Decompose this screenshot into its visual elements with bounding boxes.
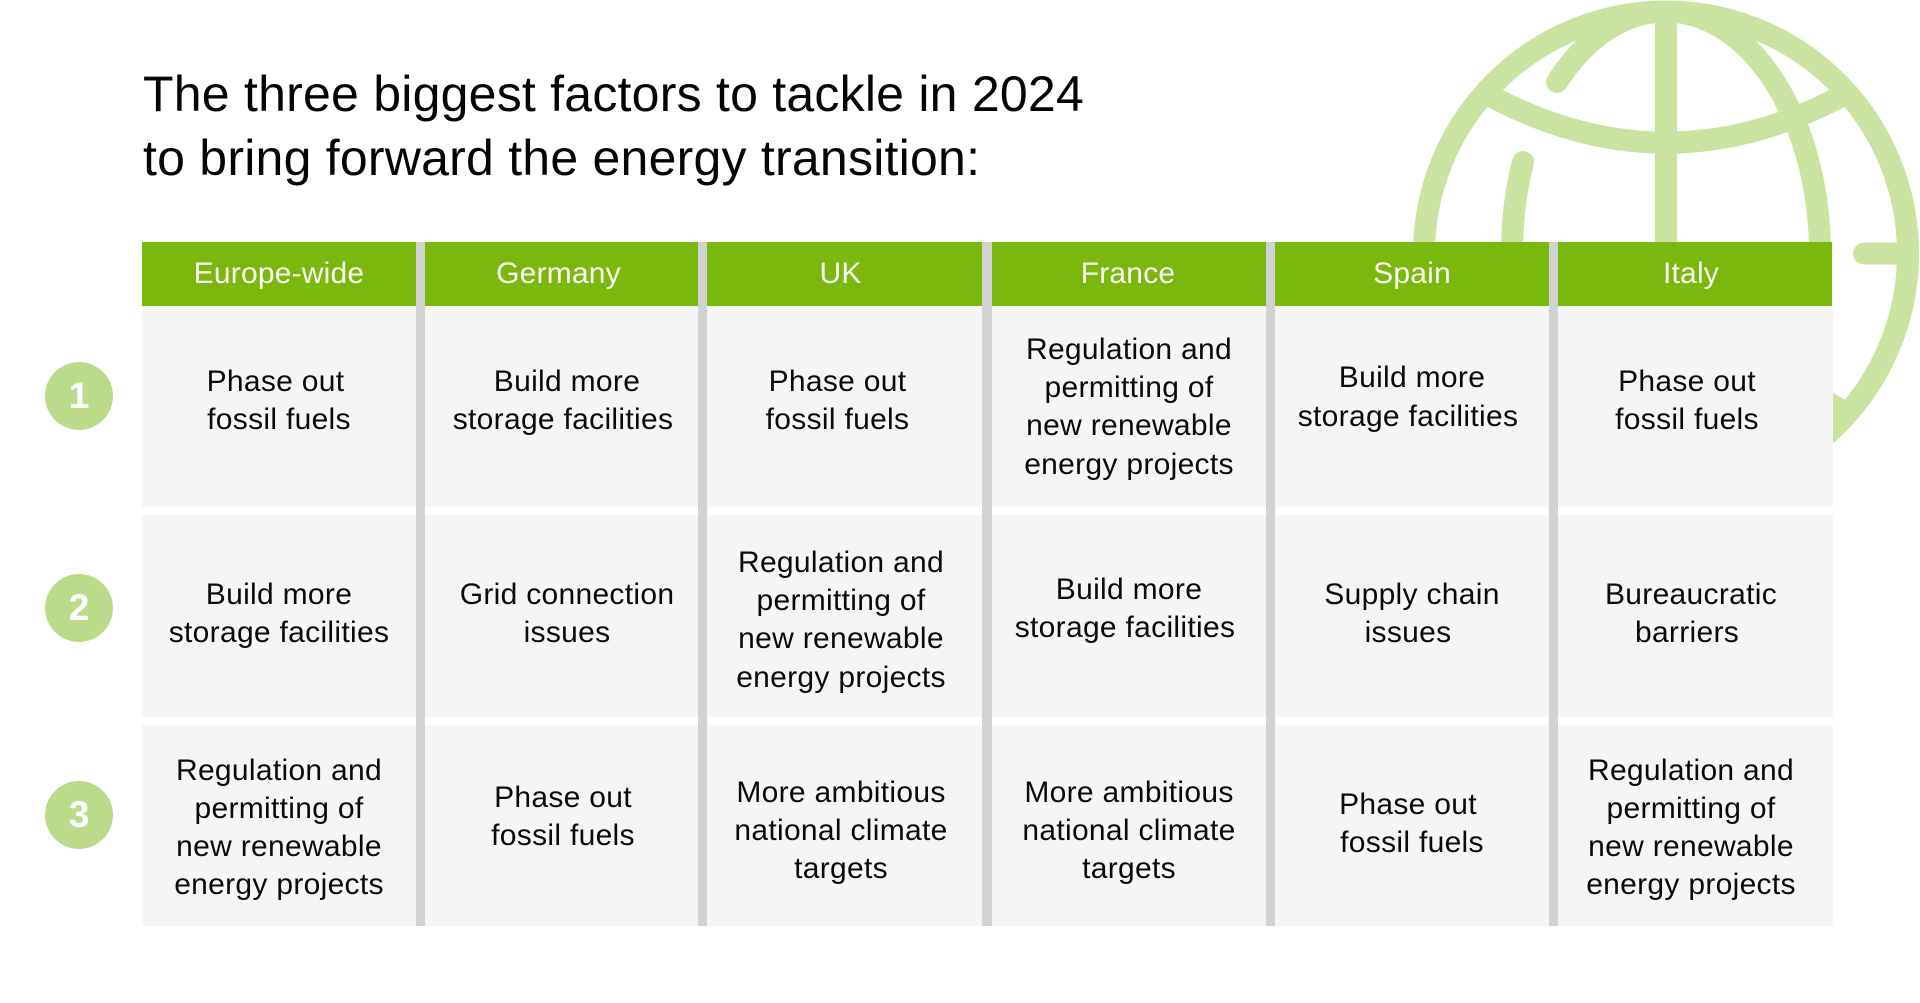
header: France: France [1081,257,1175,290]
cell: Italy rank 2: Bureaucratic [1605,578,1777,611]
cell: UK rank 3: national climate [734,814,948,847]
cell: Italy rank 1 [1558,306,1833,507]
cell: Germany rank 2: Grid connection [460,578,674,611]
cell: Germany rank 1: Build more [494,365,640,398]
cell: Spain rank 2: Supply chain [1324,578,1500,611]
title: The three biggest factors to tackle in 2024 [143,66,1084,122]
cell: France rank 2: storage facilities [1015,611,1235,644]
cell: Europe-wide rank 1: Phase out [207,365,344,398]
header: Italy: Italy [1663,257,1719,290]
cell: UK rank 3: targets [794,852,888,885]
cell: Italy rank 2 [1558,515,1833,717]
cell: Spain rank 3: fossil fuels [1340,826,1484,859]
cell: UK rank 2: permitting of [756,584,925,617]
header: Spain: Spain [1373,257,1451,290]
cell: Germany rank 2: issues [524,616,610,649]
cell: Europe-wide rank 3: permitting of [194,792,363,825]
cell: Germany rank 3: Phase out [494,781,632,814]
cell: Italy rank 2: barriers [1635,616,1739,649]
rank 3 badge [45,781,113,849]
cell: Spain rank 2: issues [1365,616,1451,649]
cell: UK rank 1: Phase out [769,365,906,398]
cell: Europe-wide rank 3: new renewable [176,830,382,863]
cell: Europe-wide rank 1 [142,306,416,507]
cell: Italy rank 3: energy projects [1586,868,1796,901]
cell: France rank 2: Build more [1056,573,1202,606]
cell: Europe-wide rank 2: Build more [206,578,352,611]
cell: France rank 3: targets [1082,852,1176,885]
cell: Europe-wide rank 1: fossil fuels [207,403,351,436]
cell: Spain rank 2 [1275,515,1549,717]
cell: Italy rank 1: Phase out [1618,365,1756,398]
cell: Italy rank 3: new renewable [1588,830,1794,863]
title [143,66,1084,186]
cell: Germany rank 3 [425,725,698,926]
header: Europe-wide: Europe-wide [194,257,364,290]
cell: France rank 1: Regulation and [1026,333,1232,366]
cell: Italy rank 3: permitting of [1606,792,1775,825]
rank 1 badge [45,362,113,430]
cell: Europe-wide rank 3: Regulation and [176,754,382,787]
cell: UK rank 1 [707,306,982,507]
cell: Europe-wide rank 3 [142,725,416,926]
cell: Italy rank 3 [1558,725,1833,926]
cell: UK rank 2 [707,515,982,717]
cell: UK rank 2: Regulation and [738,546,944,579]
cell: Germany rank 1 [425,306,698,507]
header: France [992,242,1266,306]
cell: Spain rank 1: storage facilities [1298,400,1518,433]
cell: France rank 3: More ambitious [1024,776,1234,809]
header: Europe-wide [142,242,416,306]
header: Italy [1558,242,1832,306]
cell: France rank 1: new renewable [1026,409,1232,442]
cell: Europe-wide rank 2: storage facilities [169,616,389,649]
cell: UK rank 2: energy projects [736,661,946,694]
cell: France rank 1 [992,306,1266,507]
header: UK [707,242,982,306]
cell: Spain rank 1: Build more [1339,361,1485,394]
cell: Italy rank 3: Regulation and [1588,754,1794,787]
title: to bring forward the energy transition: [143,130,980,186]
cell: Germany rank 1: storage facilities [453,403,673,436]
cell: Spain rank 3: Phase out [1339,788,1477,821]
rank 2 badge: 2 [69,587,89,628]
cell: Spain rank 1 [1275,306,1549,507]
header: Spain [1275,242,1549,306]
cell: Italy rank 1: fossil fuels [1615,403,1759,436]
cell: UK rank 3 [707,725,982,926]
header: Germany [425,242,698,306]
header: UK: UK [819,257,862,290]
cell: France rank 3 [992,725,1266,926]
rank 1 badge: 1 [69,375,89,416]
cell: Germany rank 3: fossil fuels [491,819,635,852]
cell: France rank 2 [992,515,1266,717]
rank 3 badge: 3 [69,794,89,835]
cell: Germany rank 2 [425,515,698,717]
cell: France rank 1: permitting of [1044,371,1213,404]
cell: UK rank 2: new renewable [738,622,944,655]
cell: Spain rank 3 [1275,725,1549,926]
cell: UK rank 1: fossil fuels [766,403,909,436]
cell: UK rank 3: More ambitious [736,776,946,809]
rank 2 badge [45,574,113,642]
cell: France rank 1: energy projects [1024,448,1234,481]
header: Germany: Germany [496,257,621,290]
cell: France rank 3: national climate [1022,814,1236,847]
cell: Europe-wide rank 2 [142,515,416,717]
cell: Europe-wide rank 3: energy projects [174,868,384,901]
